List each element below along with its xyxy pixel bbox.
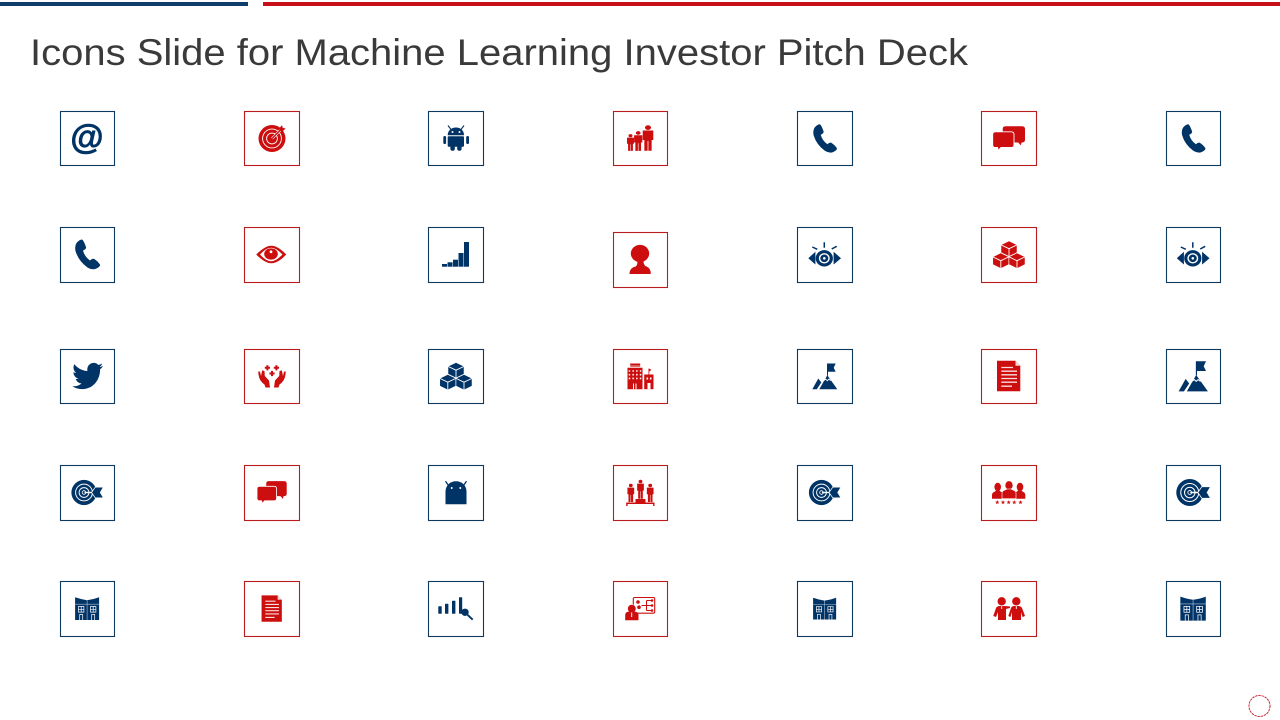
icon tile: phone handset bbox=[798, 112, 852, 166]
icon tile: phone handset bbox=[60, 228, 114, 282]
icon tile: eye bbox=[244, 228, 300, 282]
icon tile: mountain with flag bbox=[798, 350, 852, 404]
header bar: blue segment bbox=[0, 2, 248, 6]
icon tile: document bbox=[982, 350, 1036, 404]
icon tile: twin houses bbox=[798, 582, 852, 636]
icon tile: hands with plus signs bbox=[244, 350, 300, 404]
icon tile: android head bbox=[428, 466, 484, 520]
icon tile: people on podium bbox=[614, 466, 668, 520]
icon tile: at sign: @ bbox=[70, 118, 104, 156]
title: Icons Slide for Machine Learning Investor Pitch Deck bbox=[30, 32, 969, 73]
icon tile: mountain with flag bbox=[1166, 350, 1220, 404]
icon tile: two business people bbox=[982, 582, 1036, 636]
icon tile: target with chevron bbox=[60, 466, 114, 520]
icon tile: at sign bbox=[60, 112, 114, 166]
icon tile: family of three figures bbox=[614, 112, 668, 166]
icon tile: team with five stars bbox=[982, 466, 1036, 520]
badge: dashed circle seal bbox=[1249, 696, 1270, 716]
icon tile: twin houses bbox=[1166, 582, 1220, 636]
icon tile: eye with rays bbox=[1166, 228, 1220, 282]
header bar: red segment bbox=[263, 2, 1280, 6]
icon tile: twitter bird bbox=[60, 350, 114, 404]
icon tile: eye with rays bbox=[798, 228, 852, 282]
icon tile: presenter with diagram board bbox=[614, 582, 668, 636]
icon tile: chat bubbles bbox=[982, 112, 1036, 166]
icon tile: target with chevron bbox=[1166, 466, 1220, 520]
icon tile: chat bubbles bbox=[244, 466, 300, 520]
icon tile: document bbox=[244, 582, 300, 636]
icon tile: signal bars bbox=[428, 228, 484, 282]
icon tile: target with arrow bbox=[244, 112, 300, 166]
icon tile: phone handset bbox=[1166, 112, 1220, 166]
icon tile: target with chevron bbox=[798, 466, 852, 520]
icon tile: bars with magnifier bbox=[428, 582, 484, 636]
icon tile: stacked cubes bbox=[982, 228, 1036, 282]
icon tile: person bust bbox=[614, 232, 668, 288]
icon tile: stacked cubes bbox=[428, 350, 484, 404]
icon tile: office building bbox=[614, 350, 668, 404]
icon tile: android robot bbox=[428, 112, 484, 166]
icon tile: twin houses bbox=[60, 582, 114, 636]
